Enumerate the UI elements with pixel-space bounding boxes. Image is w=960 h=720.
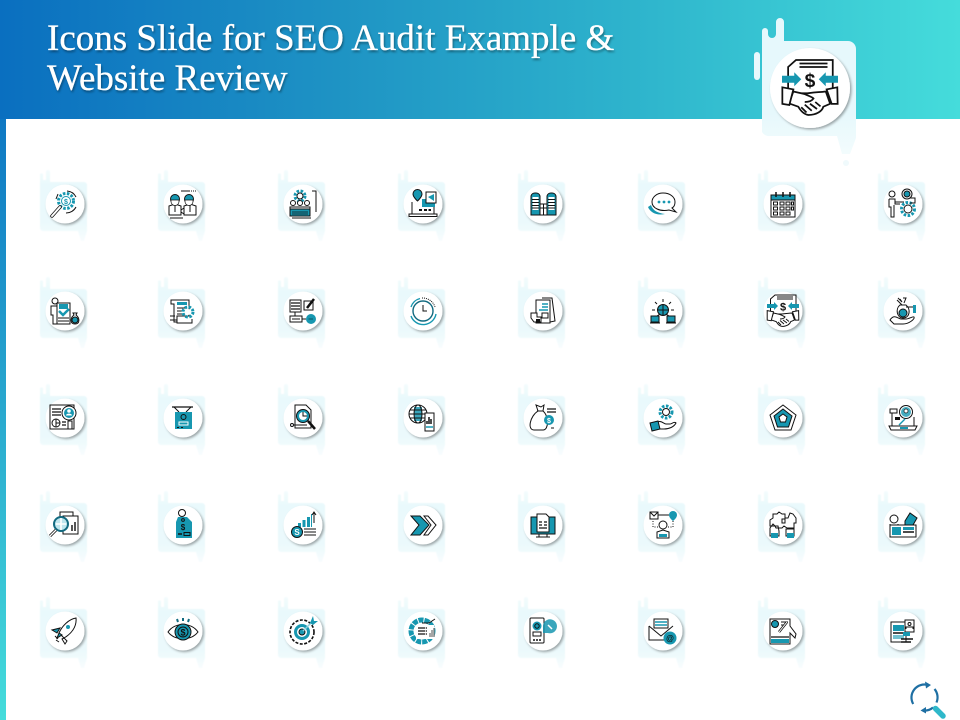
icon: chat bubble: [638, 170, 685, 241]
icon: magnifier with dollar gear: $: [64, 199, 68, 206]
icon: document with pen and chart: [758, 597, 805, 668]
icon: person, clipboard and money bag: [40, 277, 87, 348]
title: Icons Slide for SEO Audit Example &: [47, 18, 614, 59]
icon: target gear with arrow: [278, 597, 325, 668]
icon: files with profile card: [878, 597, 925, 668]
left gradient strip: [0, 119, 6, 720]
icon: growth bars with coin: S: [294, 528, 300, 537]
icon: gear on open hand: [638, 384, 685, 455]
icon: envelope with at sign: @: [666, 634, 674, 643]
icon: user with mail and location: [638, 491, 685, 562]
icon: magnifier with dollar gear: [40, 170, 87, 241]
icon grid: [40, 170, 925, 668]
icon: brand magnifier with circular arrows: [911, 682, 943, 716]
icon: hand holding money bag: [878, 277, 925, 348]
icon: handshake and dollar document: [758, 277, 805, 348]
icon: growth bars with coin: [278, 491, 325, 562]
icon: report with bar chart: [518, 277, 565, 348]
icon: document with chart and magnifier: [278, 384, 325, 455]
icon: eye with dollar iris: [158, 597, 205, 668]
icon: hanging id badge: [158, 384, 205, 455]
title: [46, 18, 616, 99]
icon: twin office towers: [518, 170, 565, 241]
icon: rocket: [40, 597, 87, 668]
icon: laptop with pin and megaphone: [398, 170, 445, 241]
icon: team under a gear: [278, 170, 325, 241]
icon: calendar: [758, 170, 805, 241]
icon: clock with circular arrows: [398, 277, 445, 348]
icon: pentagon radar: [758, 384, 805, 455]
icon: envelope with at sign: [638, 597, 685, 668]
header band: [0, 0, 960, 119]
icon: price tag: $: [181, 523, 186, 532]
title: Website Review: [47, 58, 288, 99]
icon: report with user magnifier: [40, 384, 87, 455]
icon: person with bulb and gear: [878, 170, 925, 241]
icon: laptop with user search: [878, 384, 925, 455]
icon: two business people: [158, 170, 205, 241]
icon: profile and credit card: [878, 491, 925, 562]
icon: money bag with coin: [518, 384, 565, 455]
icon: double chevron: [398, 491, 445, 562]
icon: documents, pen and check flow: [278, 277, 325, 348]
icon: globe and phone chart: [398, 384, 445, 455]
icon: phone with profile and call: [518, 597, 565, 668]
icon: globe network with monitors: [638, 277, 685, 348]
icon: magnifier over charts: [40, 491, 87, 562]
icon: scroll with gear: [158, 277, 205, 348]
icon: hands with puzzle pieces: [758, 491, 805, 562]
icon: monitor with document: [518, 491, 565, 562]
icon: eye with dollar iris: $: [180, 628, 186, 638]
large icon: handshake deal badge: [754, 18, 856, 166]
icon: gear with report: [398, 597, 445, 668]
icon: money bag with coin: $: [547, 418, 551, 425]
icon: price tag: [158, 491, 205, 562]
